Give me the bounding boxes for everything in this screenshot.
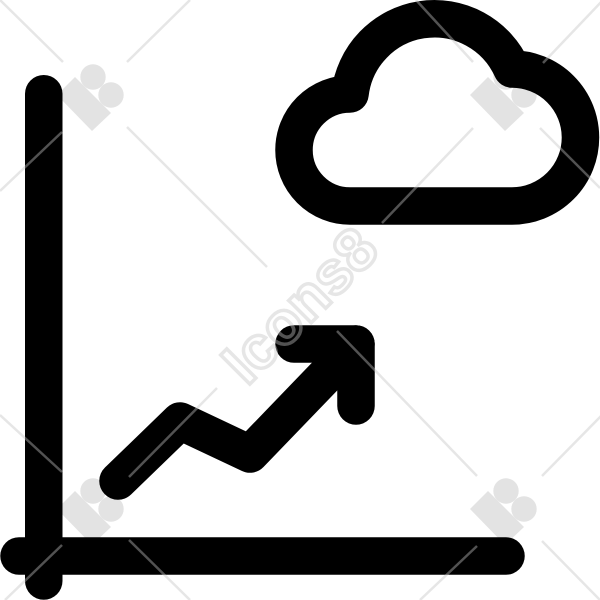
icon: cloud: [294, 19, 580, 206]
icon: vertical axis: [25, 94, 62, 581]
icon: horizontal axis: [19, 537, 506, 575]
watermark logos: [57, 64, 537, 545]
icon: rising arrow: [118, 344, 356, 481]
watermark text: Icons8: [209, 214, 391, 396]
